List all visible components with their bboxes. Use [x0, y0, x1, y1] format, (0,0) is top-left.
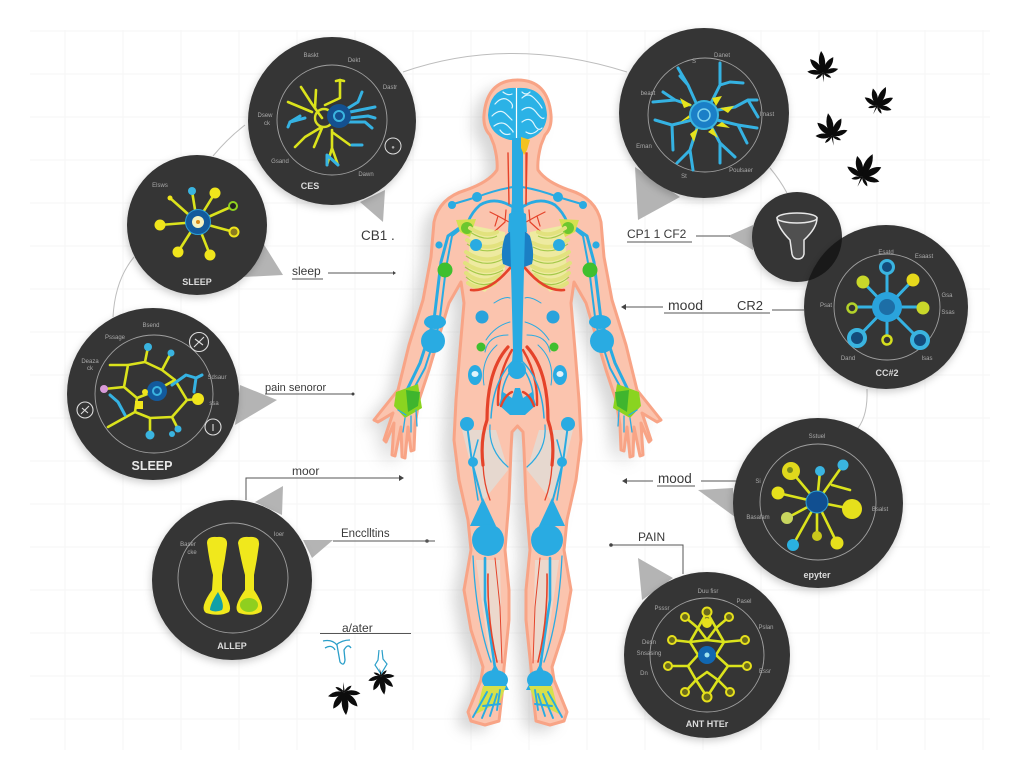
callout pointer [360, 190, 385, 222]
callout pointer [728, 225, 753, 250]
panel: mood receptor circle: epyter [803, 570, 831, 580]
body shadow [363, 87, 650, 732]
neuron [154, 187, 238, 260]
body silhouette [374, 80, 661, 725]
panel: large sleep receptor circle: ck [87, 366, 94, 372]
label: CB1: CB1 . [361, 228, 395, 243]
label: CP1 and CF2 [627, 227, 730, 242]
label: pain sensor with arrow [265, 382, 354, 396]
icons: cannabis leaves top right [805, 50, 900, 194]
panel: bottom-left bone-shaped receptor circle: ALLEP [217, 641, 247, 651]
panel: CB2 receptor circle: Psat [820, 303, 832, 309]
label: mood and CR2: mood [668, 297, 703, 313]
callout pointer [698, 488, 735, 517]
callout pointer: lower [303, 540, 333, 558]
panel: top-left receptor circle: Gsand [271, 159, 289, 165]
panel: mood receptor circle: Bsalst [872, 507, 888, 513]
panel: funnel icon circle [728, 192, 842, 282]
label: CP1 and CF2: CP1 1 CF2 [627, 227, 687, 241]
label: mood lower right: mood [658, 471, 692, 486]
callout pointer [638, 558, 673, 600]
panel: mood receptor circle [698, 418, 903, 588]
icon: leaf right bottom [366, 666, 398, 697]
panel: bottom-right receptor circle: Snsasing [637, 651, 661, 657]
connecting arcs [113, 54, 867, 428]
panel: CB2 receptor circle: Dand [841, 356, 855, 362]
panel: CB2 receptor circle: Ssas [941, 310, 955, 316]
label: pain sensor with arrow: pain senoror [265, 382, 326, 394]
panel: large sleep receptor circle: Deaza [81, 359, 99, 365]
pelvis [499, 361, 536, 415]
panel: bottom-right receptor circle: ANT HTEr [686, 719, 729, 729]
panel: bottom-left bone-shaped receptor circle: cke [187, 550, 197, 556]
panel: large sleep receptor circle: Bsend [142, 323, 160, 329]
callout pointer [635, 167, 680, 220]
panel: CB2 receptor circle: Esaast [915, 254, 934, 260]
left side vessels and nodes [394, 153, 514, 718]
panel: top-left receptor circle: Baskt [303, 53, 319, 59]
panel: top-right receptor circle: Poulsaer [729, 168, 753, 174]
panel: bottom-left bone-shaped receptor circle [152, 486, 333, 660]
panel: bottom-right receptor circle: Psssr [654, 606, 670, 612]
left bone receptor [204, 537, 230, 615]
panel: bottom-right receptor circle [624, 558, 790, 738]
panel: mood receptor circle: Si [755, 479, 761, 485]
panel: top-right receptor circle: St [681, 174, 687, 180]
label: PAIN with elbow line [609, 530, 683, 574]
panel: bottom-right receptor circle: Pasel [736, 599, 752, 605]
panel: CB2 receptor circle: Esatd [878, 250, 894, 256]
heart [508, 211, 527, 232]
panel: top-right receptor circle: S [692, 59, 696, 65]
panel: bottom-left bone-shaped receptor circle: Baser [180, 542, 196, 548]
icon: blue receptor left [323, 640, 351, 664]
panel: top-right receptor circle: Danet [714, 53, 730, 59]
icon: leaf left bottom [327, 681, 363, 716]
receptor hub and spokes [848, 260, 930, 348]
panel: top-left receptor circle: CES [301, 181, 319, 191]
panel: bottom-right receptor circle: Dn [640, 671, 648, 677]
panel: large sleep receptor circle [67, 308, 277, 480]
panel: large sleep receptor circle: ssa [209, 401, 219, 407]
panel: bottom-right receptor circle: Duu fisr [698, 589, 718, 595]
panel: top-left receptor circle [248, 37, 416, 222]
panel: top-left receptor circle: ck [264, 121, 271, 127]
right bone receptor [237, 537, 262, 615]
label: sleep with arrow [292, 264, 396, 279]
panel: large sleep receptor circle: Sdsaur [207, 375, 227, 381]
panel: large sleep receptor circle: Pssage [105, 335, 126, 341]
panel: top-left receptor circle: Dastr [383, 85, 397, 91]
icon: funnel [777, 213, 817, 259]
neuron [653, 63, 758, 170]
panel: mood receptor circle: Basalam [746, 515, 770, 521]
panel: sleep receptor circle: Elsws [152, 183, 168, 189]
panel: top-left receptor circle: Dekt [348, 58, 360, 64]
label: moor with elbow arrow [246, 464, 404, 500]
brainstem marker [521, 137, 530, 155]
panel: bottom-right receptor circle: Pslan [758, 625, 774, 631]
label: a/ater with leaves: a/ater [342, 621, 373, 635]
panel: top-left receptor circle: Dawn [358, 172, 374, 178]
neuron network [664, 608, 751, 702]
label: Encctaltins with arrow: Encclltins [341, 528, 390, 540]
brain [488, 88, 547, 140]
panel: top-right receptor circle: Eman [636, 144, 652, 150]
panel: bottom-right receptor circle: Desn [642, 640, 656, 646]
label: moor with elbow arrow: moor [292, 464, 319, 478]
panel: mood receptor circle: Sstuel [809, 434, 825, 440]
panel: CB2 receptor circle: Isas [921, 356, 933, 362]
label: mood lower right [622, 471, 736, 486]
callout pointer [243, 243, 283, 277]
neuron [288, 80, 375, 165]
panel: top-right receptor circle [619, 28, 789, 220]
neuron network [100, 343, 204, 440]
label: sleep with arrow: sleep [292, 264, 321, 278]
label: mood and CR2: CR2 [737, 298, 763, 313]
panel: CB2 receptor circle [804, 225, 968, 389]
human body figure [363, 80, 661, 732]
panel: CB2 receptor circle: Gsa [941, 293, 953, 299]
panel: top-left receptor circle: Dsew [257, 113, 273, 119]
panel: top-right receptor circle: lmast [760, 112, 774, 118]
overlap of circles [808, 238, 842, 280]
icon: blue receptor right [375, 650, 387, 674]
panel: CB2 receptor circle: CC#2 [875, 368, 899, 378]
panel: bottom-left bone-shaped receptor circle: Ioer [274, 532, 284, 538]
spinal cord [510, 138, 525, 362]
panel: sleep receptor circle: SLEEP [182, 277, 212, 287]
label: mood and CR2 [621, 297, 804, 313]
icon badges [77, 332, 221, 435]
label: a/ater with leaves [320, 621, 411, 716]
panel: large sleep receptor circle: SLEEP [132, 459, 172, 473]
callout pointer: upper [255, 486, 283, 515]
panel: top-right receptor circle: beast [641, 91, 656, 97]
neuron [772, 460, 862, 551]
panel: bottom-right receptor circle: Essr [759, 669, 771, 675]
label: Encctaltins with arrow [333, 528, 435, 543]
label: PAIN with elbow line: PAIN [638, 530, 665, 544]
panel: sleep receptor circle [127, 155, 283, 295]
panel: top-left receptor circle: ● [391, 145, 395, 151]
callout pointer [235, 385, 277, 425]
right side asymmetry vessel [525, 153, 527, 204]
right side vessels and nodes [521, 153, 641, 718]
